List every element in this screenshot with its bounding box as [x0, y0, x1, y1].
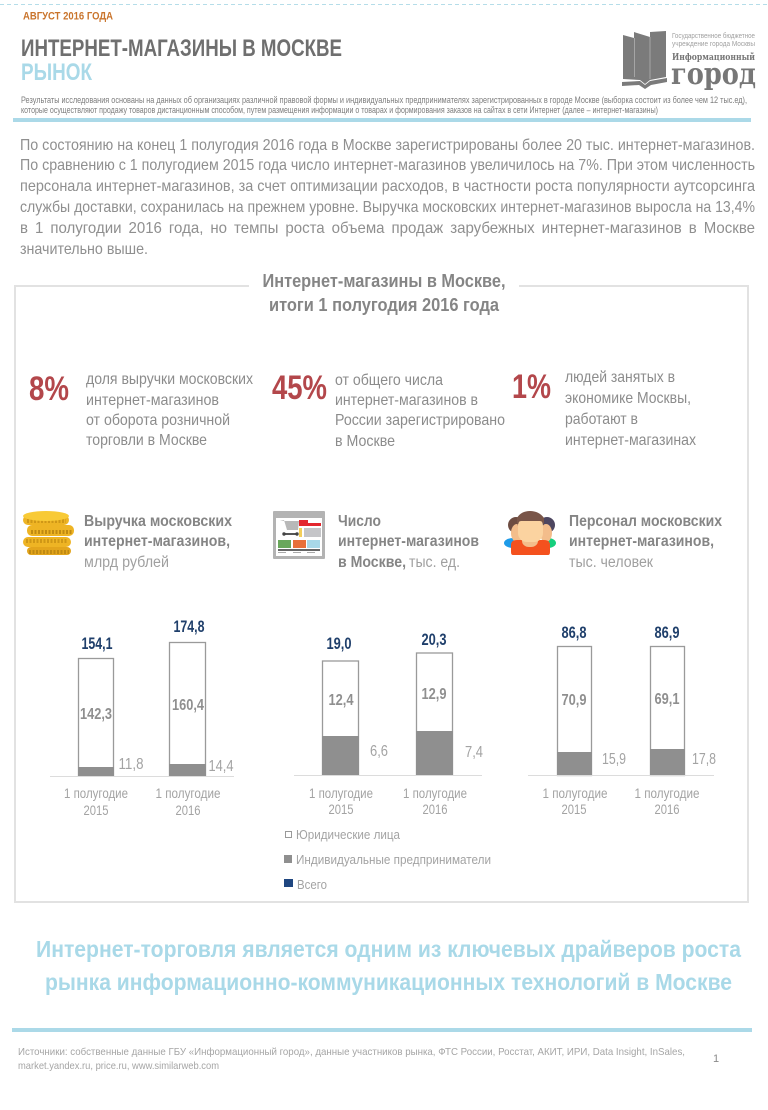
stat: 8%: 8% [29, 370, 69, 408]
chart: staff: 70,9 [562, 692, 587, 709]
stat: 45%: России зарегистрировано [335, 412, 505, 429]
chart: store count: 20,3 [422, 631, 446, 649]
chart: store count: 6,6 [370, 743, 388, 760]
stat: 1%: экономике Москвы, [565, 390, 691, 407]
legend: Индивидуальные предприниматели [296, 853, 491, 867]
chart: store count: 1 полугодие [309, 786, 373, 801]
chart: revenue: 1 полугодие [156, 786, 220, 801]
panel heading: Интернет-магазины в Москве, [262, 271, 506, 291]
chart: store count: 1 полугодие [403, 786, 467, 801]
heading: staff: тыс. человек [569, 554, 653, 571]
stat: 1%: интернет-магазинах [565, 432, 696, 449]
logo: Информационный город: Государственное бюджетное [672, 32, 755, 40]
heading: store count [338, 513, 479, 571]
chart: staff: 2016 [654, 802, 680, 817]
heading: revenue: интернет-магазинов, [84, 533, 230, 550]
panel frame [15, 286, 748, 902]
stat: 45%: 45% [272, 369, 327, 407]
intro text: значительно выше. [20, 241, 148, 258]
icon: coins [23, 511, 74, 555]
legend: Юридические лица [296, 828, 400, 842]
chart: staff: 69,1 [654, 691, 680, 708]
heading: store count: Число [338, 513, 381, 530]
chart: staff: 2015 [562, 802, 586, 817]
panel heading [262, 271, 506, 315]
sources [18, 1046, 685, 1072]
heading: revenue [84, 513, 232, 571]
legend [284, 828, 491, 892]
chart: revenue [50, 618, 234, 818]
chart: store count: 7,4 [465, 744, 483, 761]
chart: store count: 2015 [328, 802, 354, 817]
title [21, 35, 342, 86]
chart: revenue: 11,8 [118, 756, 144, 773]
heading: store count: интернет-магазинов [338, 533, 479, 550]
legend: Всего [297, 878, 327, 892]
logo: Информационный город: город [671, 57, 756, 92]
title: РЫНОК [21, 59, 92, 86]
chart: revenue: 174,8 [174, 618, 204, 636]
chart: revenue: 154,1 [82, 635, 112, 653]
chart: staff: 86,9 [654, 624, 680, 642]
date label: АВГУСТ 2016 ГОДА [23, 10, 113, 22]
logo: Информационный город [622, 31, 756, 92]
page number: 1 [713, 1053, 719, 1065]
stat: 1%: 1% [512, 368, 551, 406]
chart: staff: 15,9 [602, 751, 626, 768]
chart: store count: 12,9 [422, 686, 447, 703]
chart: revenue: 2016 [176, 803, 200, 818]
chart: store count [294, 631, 483, 817]
sources: market.yandex.ru, price.ru, www.similarweb.com [18, 1060, 219, 1072]
sources: Источники: собственные данные ГБУ «Информационный город», данные участников рынка, ФТС России, Росстат, АКИТ, ИРИ, Data Insight, InSales, [18, 1046, 685, 1058]
stat: 45%: в Москве [335, 433, 395, 450]
chart: staff: 86,8 [562, 624, 586, 642]
stat: 1% [512, 368, 696, 449]
chart: revenue: 1 полугодие [64, 786, 128, 801]
chart: store count: 19,0 [326, 635, 352, 653]
title: ИНТЕРНЕТ-МАГАЗИНЫ В МОСКВЕ [21, 35, 342, 62]
chart: staff [528, 624, 716, 817]
chart: store count: 12,4 [328, 692, 354, 709]
stat: 45%: от общего числа [335, 372, 443, 389]
heading: staff: Персонал московских [569, 513, 722, 530]
heading: staff: интернет-магазинов, [569, 533, 714, 550]
stat: 45% [272, 369, 505, 450]
logo: Информационный город: учреждение города Москвы [672, 41, 755, 48]
heading: store count: тыс. ед. [409, 554, 460, 571]
heading: revenue: млрд рублей [84, 554, 169, 571]
icon: staff group [504, 511, 556, 555]
chart: staff: 1 полугодие [634, 786, 700, 801]
chart: revenue: 160,4 [172, 697, 204, 714]
heading: revenue: Выручка московских [84, 513, 232, 530]
stat: 1%: работают в [565, 411, 638, 428]
stat: 8% [29, 370, 253, 449]
conclusion statement [36, 936, 741, 995]
heading: store count: в Москве, [338, 554, 406, 571]
panel heading: итоги 1 полугодия 2016 года [269, 295, 500, 315]
stat: 8%: интернет-магазинов [86, 392, 219, 409]
stat: 8%: торговли в Москве [86, 432, 207, 449]
heading: staff [569, 513, 722, 571]
chart: store count: 2016 [422, 802, 448, 817]
stat: 1%: людей занятых в [565, 369, 675, 386]
stat: 45%: интернет-магазинов в [335, 392, 478, 409]
stat: 8%: доля выручки московских [86, 371, 253, 388]
stat: 8%: от оборота розничной [86, 412, 230, 429]
chart: staff: 17,8 [692, 751, 716, 768]
chart: staff: 1 полугодие [542, 786, 608, 801]
intro text [20, 137, 755, 258]
chart: revenue: 142,3 [80, 706, 112, 723]
methodology note [21, 95, 747, 115]
chart: revenue: 2015 [84, 803, 108, 818]
icon: online store page [273, 511, 325, 559]
chart: revenue: 14,4 [208, 758, 234, 775]
